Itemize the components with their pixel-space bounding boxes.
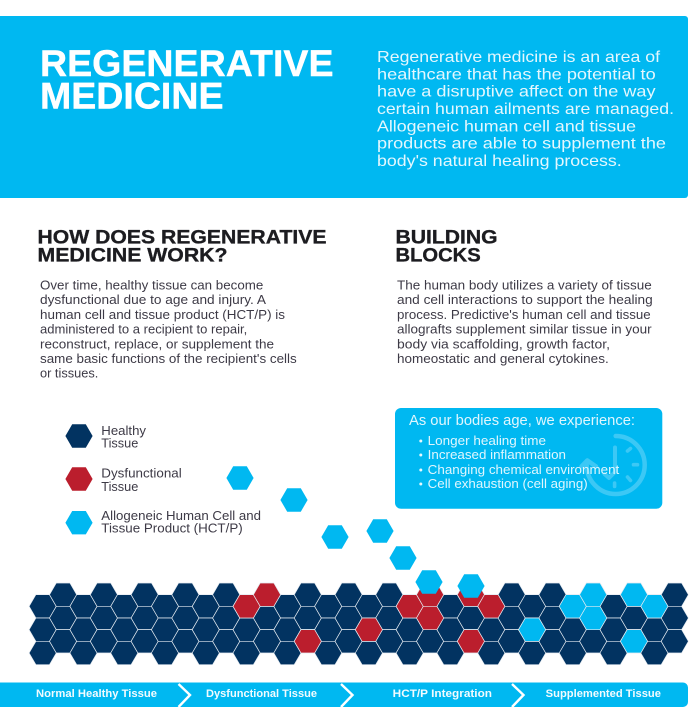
callout bullet list: Cell exhaustion (cell aging): [428, 476, 588, 491]
text block: building blocks: The human body utilizes a variety of tissue: [397, 278, 652, 292]
arrow: step 2 to 3: [341, 684, 352, 707]
header description: body's natural healing process.: [377, 153, 622, 170]
text block: how it works: same basic functions of the recipient's cells: [40, 352, 297, 366]
header description: products are able to supplement the: [377, 136, 666, 153]
text block: how it works: Over time, healthy tissue can become: [40, 278, 263, 292]
arrow: step 1 to 2: [178, 684, 190, 707]
tissue hexagon grid: [29, 583, 688, 665]
step label: dysfunctional tissue: Dysfunctional Tissue: [206, 688, 317, 700]
header banner: [0, 16, 688, 198]
legend item: healthy tissue: [65, 424, 147, 451]
legend: [65, 424, 261, 536]
arrow: step 3 to 4: [512, 684, 524, 707]
title: [40, 43, 334, 117]
step label: supplemented tissue: Supplemented Tissue: [546, 688, 661, 700]
text block: building blocks: body via scaffolding, growth factor,: [397, 337, 610, 351]
heading: how does regenerative medicine work: HOW DOES REGENERATIVE: [38, 226, 327, 248]
healthy tissue hexagons: [29, 583, 688, 665]
text block: how it works: human cell and tissue product (HCT/P) is: [40, 308, 285, 322]
legend item: healthy tissue: Healthy: [101, 424, 147, 438]
heading: how does regenerative medicine work: [38, 226, 327, 267]
legend item: dysfunctional tissue: Dysfunctional: [101, 467, 182, 481]
header description: Allogeneic human cell and tissue: [377, 118, 636, 135]
step label: HCT/P integration: HCT/P Integration: [393, 688, 492, 700]
header description: Regenerative medicine is an area of: [377, 49, 661, 66]
callout bullet list: [419, 433, 620, 491]
text block: building blocks: process. Predictive's human cell and tissue: [397, 308, 651, 322]
icon: clock: [582, 436, 645, 494]
floating HCT/P hexagons: [226, 466, 485, 598]
callout bullet list: Increased inflammation: [428, 447, 566, 462]
text block: how it works: reconstruct, replace, or supplement the: [40, 337, 274, 351]
text block: how it works: or tissues.: [40, 366, 98, 380]
legend item: dysfunctional tissue: Tissue: [101, 480, 138, 494]
integrated HCT/P hexagons: [518, 583, 668, 653]
text block: how it works: [40, 278, 297, 380]
process bar: [0, 682, 688, 707]
title: MEDICINE: [40, 76, 224, 117]
callout heading: As our bodies age, we experience:: [409, 413, 635, 429]
text block: building blocks: homeostatic and general cytokines.: [397, 352, 609, 366]
legend item: HCT/P: Allogeneic Human Cell and: [101, 509, 261, 523]
text block: how it works: administered to a recipient to repair,: [40, 322, 247, 336]
legend item: HCT/P: Tissue Product (HCT/P): [101, 522, 243, 536]
legend item: HCT/P: [65, 509, 261, 536]
text block: how it works: dysfunctional due to age and injury. A: [40, 293, 267, 307]
header description: certain human ailments are managed.: [377, 101, 674, 118]
title: REGENERATIVE: [40, 43, 334, 84]
heading: building blocks: BUILDING: [396, 226, 498, 248]
step label: normal healthy tissue: Normal Healthy Tissue: [36, 688, 157, 700]
legend item: dysfunctional tissue: [65, 467, 182, 494]
callout bullet list: Changing chemical environment: [428, 462, 620, 477]
heading: building blocks: [396, 226, 498, 267]
legend item: healthy tissue: Tissue: [101, 437, 138, 451]
text block: building blocks: [397, 278, 653, 366]
heading: building blocks: BLOCKS: [396, 245, 481, 267]
text block: building blocks: allografts supplement similar tissue in your: [397, 322, 652, 336]
callout bullet list: Longer healing time: [428, 433, 546, 448]
dysfunctional tissue hexagons: [233, 583, 505, 653]
header description: healthcare that has the potential to: [377, 66, 656, 83]
text block: building blocks: and cell interactions to support the healing: [397, 293, 653, 307]
panel: aging callout: [395, 408, 662, 509]
heading: how does regenerative medicine work: MEDICINE WORK?: [38, 245, 228, 267]
header description: [377, 49, 674, 170]
header description: have a disruptive affect on the way: [377, 84, 656, 101]
